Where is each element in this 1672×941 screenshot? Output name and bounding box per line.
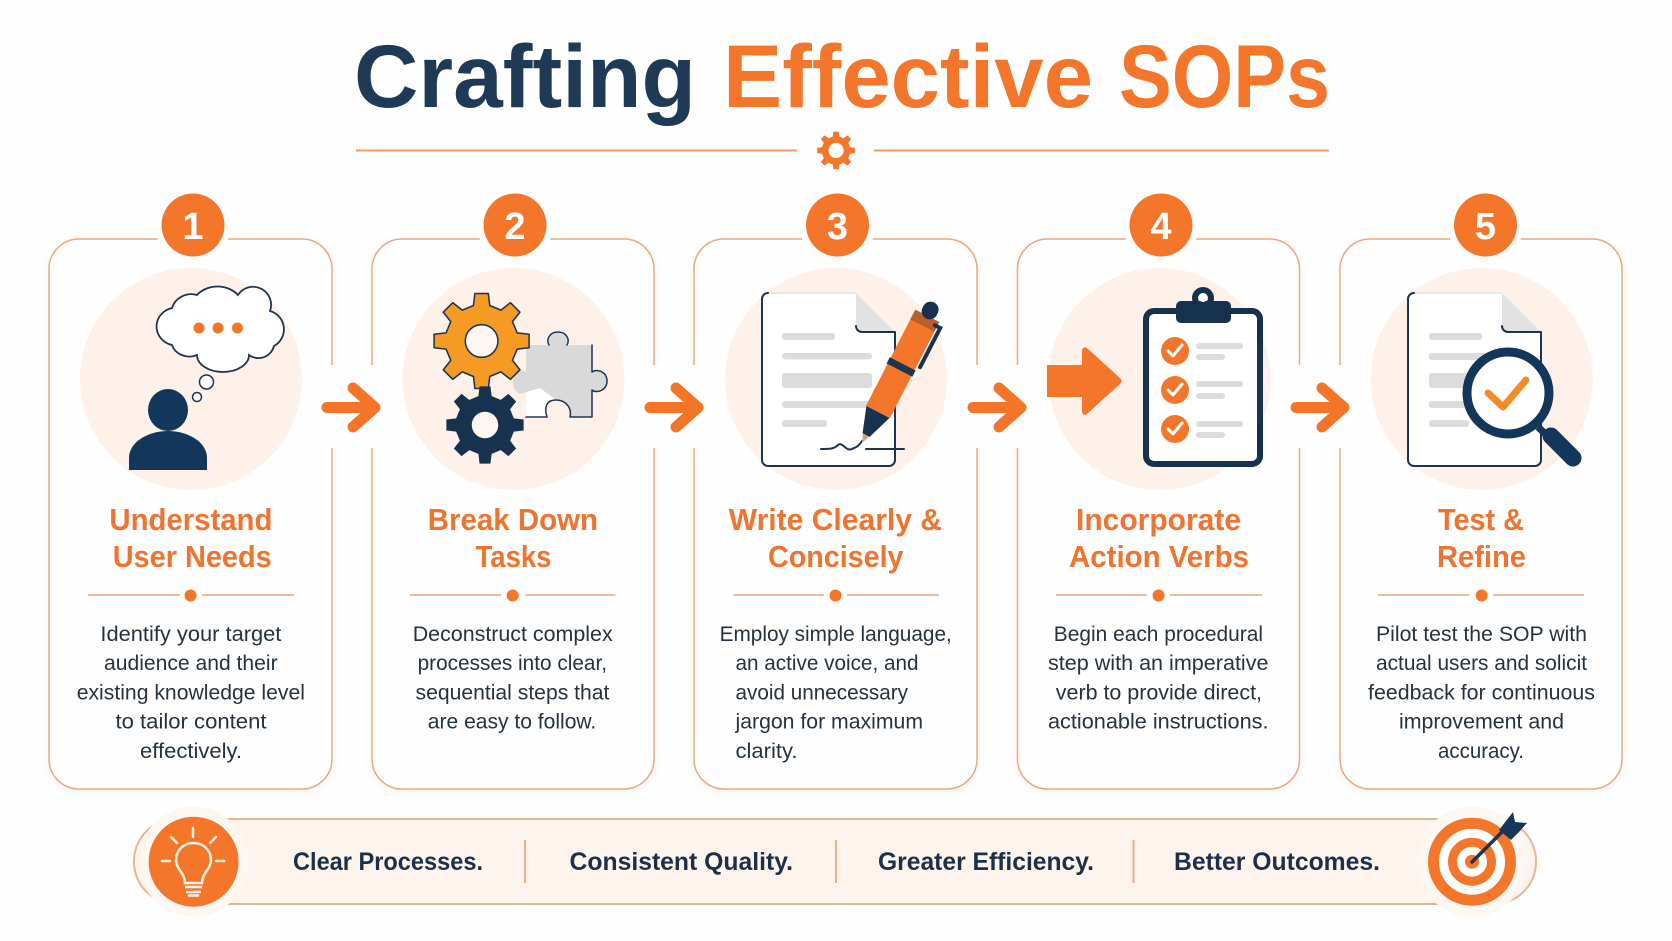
description: to tailor content	[116, 710, 267, 734]
description: Pilot test the SOP with	[1376, 622, 1587, 646]
arrow: step 1 to 2	[326, 365, 378, 448]
description: Deconstruct complex	[413, 622, 613, 646]
number badge 4	[1123, 187, 1199, 263]
description: step with an imperative	[1048, 651, 1268, 675]
description: effectively.	[140, 739, 242, 763]
description	[413, 622, 613, 734]
icon background	[1049, 268, 1271, 490]
description	[1368, 622, 1595, 763]
description	[1048, 622, 1268, 734]
description: processes into clear,	[418, 651, 607, 675]
number badge 5	[1448, 187, 1524, 263]
heading	[729, 502, 942, 574]
heading: User Needs	[113, 539, 272, 574]
title divider with gear	[356, 132, 1329, 169]
panel: step 2	[372, 239, 654, 789]
card frame	[1340, 239, 1622, 789]
arrow: step 3 to 4	[972, 365, 1024, 448]
arrow: step 2 to 3	[649, 365, 701, 448]
description: actionable instructions.	[1048, 710, 1268, 734]
card frame	[49, 239, 332, 789]
heading	[1437, 502, 1526, 574]
icon background	[1371, 268, 1593, 490]
heading: Test &	[1438, 502, 1524, 537]
description: audience and their	[104, 651, 278, 675]
banner background	[134, 819, 1536, 904]
card frame	[372, 239, 654, 789]
panel: step 5	[1340, 239, 1622, 789]
description: Identify your target	[100, 622, 281, 646]
card frame	[1018, 239, 1300, 789]
arrow: step 4 to 5	[1295, 365, 1347, 448]
description: clarity.	[736, 739, 798, 763]
number badge 3	[800, 187, 876, 263]
description: an active voice, and	[736, 651, 918, 675]
panel: step 4	[1018, 239, 1300, 789]
heading: Incorporate	[1076, 502, 1241, 537]
card frame	[694, 239, 977, 789]
heading: Break Down	[428, 502, 598, 537]
icon: light bulb	[139, 807, 249, 917]
icon background	[80, 268, 302, 490]
icon: target with arrow	[1417, 807, 1527, 917]
heading	[109, 502, 272, 574]
panel: step 3	[694, 239, 977, 789]
number badge 2	[477, 187, 553, 263]
heading: Tasks	[476, 539, 552, 574]
description: verb to provide direct,	[1056, 680, 1262, 704]
number badge 3: 3	[827, 206, 848, 248]
heading	[1069, 502, 1249, 574]
heading: Refine	[1437, 539, 1526, 574]
description: existing knowledge level	[77, 680, 305, 704]
description: sequential steps that	[416, 680, 609, 704]
number badge 4: 4	[1150, 206, 1172, 248]
description: actual users and solicit	[1376, 651, 1587, 675]
icon: document and pen	[762, 293, 949, 466]
icon background	[725, 268, 947, 490]
title: Crafting	[354, 26, 696, 126]
slogan: greater efficiency: Greater Efficiency.	[878, 848, 1094, 876]
title: Effective	[723, 26, 1093, 126]
title	[354, 26, 1330, 126]
description: Begin each procedural	[1054, 622, 1263, 646]
icon: gears and puzzle piece	[434, 293, 607, 464]
panel: step 1	[49, 239, 332, 789]
slogan: clear processes: Clear Processes.	[293, 848, 483, 876]
divider	[88, 590, 294, 602]
title: SOPs	[1119, 26, 1330, 126]
number badge 2: 2	[504, 206, 526, 248]
heading: Understand	[109, 502, 272, 537]
icon background	[402, 268, 624, 490]
icon: arrow and clipboard	[1047, 290, 1260, 464]
description: feedback for continuous	[1368, 680, 1595, 704]
icon: person with thought bubble	[129, 287, 284, 470]
description: jargon for maximum	[735, 710, 923, 734]
divider	[1378, 590, 1584, 602]
divider	[410, 590, 616, 602]
description	[77, 622, 305, 763]
slogan: consistent quality: Consistent Quality.	[570, 848, 793, 876]
number badge 1	[155, 187, 231, 263]
divider	[1056, 590, 1262, 602]
heading: Action Verbs	[1069, 539, 1249, 574]
description: improvement and	[1399, 710, 1564, 734]
description: Employ simple language,	[720, 622, 952, 646]
footer banner	[134, 807, 1536, 917]
icon: title gear	[817, 132, 855, 169]
number badge 5: 5	[1475, 206, 1496, 248]
description	[720, 622, 952, 763]
heading: Concisely	[768, 539, 904, 574]
description: are easy to follow.	[428, 710, 596, 734]
heading: Write Clearly &	[729, 502, 942, 537]
description: accuracy.	[1438, 739, 1524, 763]
slogan: better outcomes: Better Outcomes.	[1174, 848, 1380, 876]
icon: document and magnifier	[1408, 293, 1573, 466]
description: avoid unnecessary	[736, 680, 908, 704]
number badge 1: 1	[182, 206, 204, 248]
heading	[428, 502, 598, 574]
divider	[734, 590, 939, 602]
